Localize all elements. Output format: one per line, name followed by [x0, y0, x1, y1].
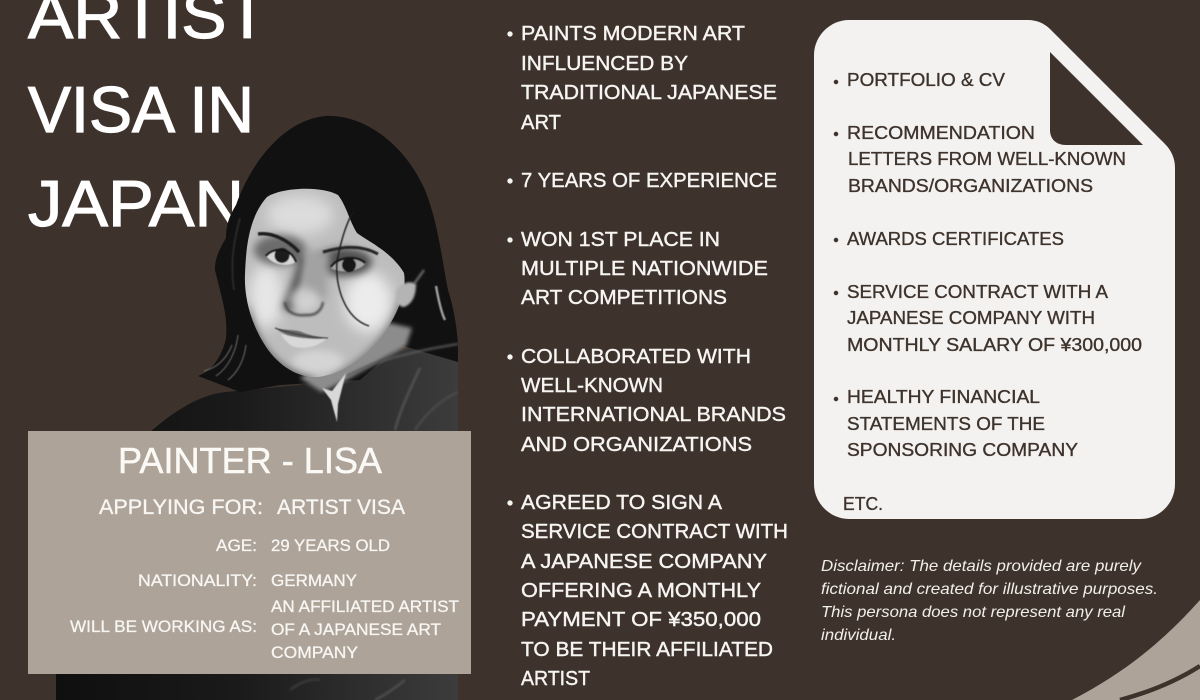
item: financial statements: STATEMENTS OF THE — [847, 413, 1045, 434]
qualification: modern art: PAINTS MODERN ART — [521, 22, 745, 45]
right cheek highlight — [344, 272, 392, 332]
qualification: service contract — [508, 491, 788, 690]
qualification: service contract: AGREED TO SIGN A — [521, 491, 722, 514]
nationality row: NATIONALITY: — [138, 571, 257, 590]
item: service contract — [834, 281, 1142, 355]
item: financial statements — [834, 386, 1078, 460]
item: recommendation letters: BRANDS/ORGANIZATIONS — [848, 175, 1093, 196]
right eye — [331, 258, 365, 272]
title — [28, 0, 268, 240]
disclaimer — [821, 558, 1158, 644]
disclaimer: individual. — [821, 627, 896, 644]
age row — [216, 536, 390, 555]
item: service contract: SERVICE CONTRACT WITH A — [847, 281, 1109, 302]
disclaimer: Disclaimer: The details provided are purely — [821, 558, 1142, 575]
age row: AGE: — [216, 536, 257, 555]
qualification: service contract: OFFERING A MONTHLY — [521, 579, 761, 602]
panel background — [28, 431, 471, 674]
qualification: service contract: TO BE THEIR AFFILIATED — [521, 638, 773, 661]
forehead light — [266, 195, 334, 235]
qualification: experience: 7 YEARS OF EXPERIENCE — [521, 169, 777, 192]
title: JAPAN — [28, 167, 244, 240]
lower face edge shadow — [248, 303, 318, 377]
ear highlight — [414, 270, 424, 284]
document list — [834, 69, 1142, 514]
qualification: competitions: ART COMPETITIONS — [521, 286, 727, 309]
right eyebrow — [323, 247, 378, 254]
eye socket band — [254, 235, 306, 265]
qualification: collaborations: AND ORGANIZATIONS — [521, 433, 752, 456]
portrait of Lisa — [56, 116, 458, 700]
mouth — [275, 328, 328, 348]
occupation row: COMPANY — [271, 643, 358, 662]
applying for row: ARTIST VISA — [277, 496, 405, 519]
nose bridge tone — [300, 250, 330, 300]
ear — [396, 282, 416, 307]
qualification: collaborations: COLLABORATED WITH — [521, 345, 751, 368]
qualification: service contract: PAYMENT OF ¥350,000 — [521, 608, 761, 631]
qualification: collaborations: INTERNATIONAL BRANDS — [521, 403, 786, 426]
qualification: modern art: TRADITIONAL JAPANESE — [521, 81, 777, 104]
disclaimer: This persona does not represent any real — [821, 604, 1125, 621]
item: recommendation letters — [834, 122, 1126, 196]
qualification: modern art: INFLUENCED BY — [521, 52, 688, 75]
folded corner — [1050, 52, 1143, 145]
item: financial statements: HEALTHY FINANCIAL — [847, 386, 1040, 407]
qualification: collaborations — [508, 345, 786, 456]
item: awards: AWARDS CERTIFICATES — [847, 228, 1064, 249]
qualification: service contract: ARTIST — [521, 667, 590, 690]
item: recommendation letters: RECOMMENDATION — [847, 122, 1035, 143]
left eyebrow — [258, 234, 299, 252]
occupation row: AN AFFILIATED ARTIST — [271, 597, 459, 616]
shadow left of nose bridge — [282, 255, 308, 312]
applying for row: APPLYING FOR: — [99, 496, 263, 519]
qualification: collaborations: WELL-KNOWN — [521, 374, 663, 397]
applying for row — [99, 496, 405, 519]
qualification: competitions — [508, 228, 768, 309]
profile name: PAINTER - LISA — [118, 440, 382, 481]
age row: 29 YEARS OLD — [271, 536, 390, 555]
hair — [198, 116, 458, 392]
nose — [285, 288, 323, 315]
jacket folds — [290, 344, 458, 700]
qualification: modern art: ART — [521, 111, 561, 134]
qualification: competitions: MULTIPLE NATIONWIDE — [521, 257, 768, 280]
document panel: required documents — [814, 20, 1175, 519]
item: portfolio: PORTFOLIO & CV — [847, 69, 1006, 90]
occupation row — [70, 597, 459, 662]
left cheek highlight — [249, 264, 283, 328]
qualification: service contract: SERVICE CONTRACT WITH — [521, 520, 788, 543]
item: etc: ETC. — [843, 493, 883, 514]
qualification: competitions: WON 1ST PLACE IN — [521, 228, 720, 251]
left eye — [266, 248, 296, 265]
item: service contract: JAPANESE COMPANY WITH — [847, 307, 1095, 328]
item: service contract: MONTHLY SALARY OF ¥300,000 — [847, 334, 1142, 355]
qualifications list — [508, 22, 788, 690]
face — [244, 188, 405, 377]
chin light — [292, 350, 344, 374]
zipper — [322, 373, 346, 422]
qualification: modern art — [508, 22, 777, 134]
profile panel — [28, 431, 471, 674]
neck — [300, 322, 412, 392]
face-framing hair strand — [337, 212, 369, 326]
hair highlights — [204, 218, 445, 380]
occupation row: OF A JAPANESE ART — [271, 620, 441, 639]
title: VISA IN — [28, 73, 254, 146]
item: financial statements: SPONSORING COMPANY — [847, 439, 1078, 460]
nationality row — [138, 571, 357, 590]
occupation row: WILL BE WORKING AS: — [70, 617, 257, 636]
disclaimer: fictional and created for illustrative purposes. — [821, 581, 1158, 598]
qualification: service contract: A JAPANESE COMPANY — [521, 550, 767, 573]
item: recommendation letters: LETTERS FROM WELL-KNOWN — [848, 148, 1126, 169]
nationality row: GERMANY — [271, 571, 357, 590]
decorative corner curves — [1072, 600, 1200, 700]
jacket — [56, 340, 458, 700]
document shape — [814, 20, 1175, 519]
